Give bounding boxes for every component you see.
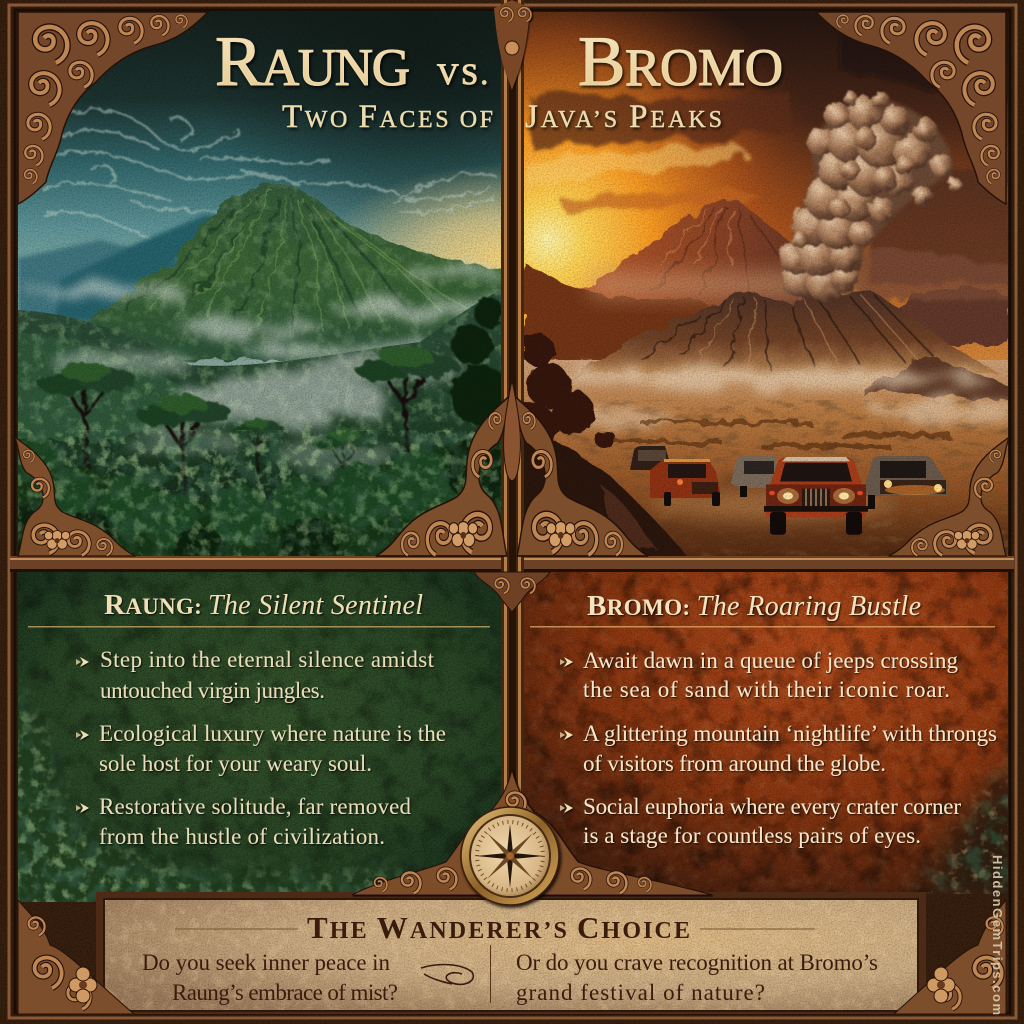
title: BROMO bbox=[578, 23, 783, 101]
foliage lower left bbox=[18, 680, 418, 902]
ornament: bottom right corner bbox=[894, 900, 1006, 1014]
sunset sky bbox=[524, 12, 1008, 372]
jeep: red left bbox=[650, 459, 720, 506]
panel: Bromo illustration bbox=[502, 12, 1024, 570]
swirling clouds bbox=[42, 109, 496, 238]
icon: compass bbox=[461, 807, 559, 905]
bullet 2 bbox=[76, 721, 446, 776]
bullet 1: untouched virgin jungles. bbox=[100, 678, 325, 703]
bullet 3: Restorative solitude, far removed bbox=[99, 794, 412, 819]
text block: Raung bbox=[28, 589, 490, 849]
Bromo crater bbox=[570, 290, 1008, 400]
ornament: beam junction bbox=[474, 572, 550, 612]
ornament: pillar finial bbox=[504, 380, 520, 480]
mist bands bbox=[30, 267, 510, 357]
parchment rules bbox=[175, 928, 815, 930]
right question: Or do you crave recognition at Bromo’s bbox=[516, 950, 878, 975]
bullet 2: sole host for your weary soul. bbox=[99, 751, 372, 776]
subtitle: TWO FACES OF bbox=[282, 99, 493, 135]
ornament: picture lower left bbox=[15, 437, 135, 556]
sand sea bbox=[524, 360, 1008, 570]
bullet 3: Social euphoria where every crater corner bbox=[583, 794, 961, 819]
road dust bbox=[668, 471, 872, 552]
jungle canopy bbox=[18, 296, 501, 556]
watermark: HiddenGemTrips.com bbox=[990, 855, 1005, 1015]
bullet 1: Await dawn in a queue of jeeps crossing bbox=[583, 648, 958, 673]
Raung mountain bbox=[60, 183, 510, 363]
panel: Raung illustration bbox=[4, 12, 514, 578]
text block: Bromo bbox=[530, 590, 997, 848]
right question: grand festival of nature? bbox=[516, 980, 765, 1005]
bullet 1: Step into the eternal silence amidst bbox=[100, 647, 435, 672]
bullet 1 bbox=[560, 648, 958, 702]
horizontal frame beam bbox=[10, 556, 1014, 572]
title: VS. bbox=[437, 58, 488, 91]
bullet 2: of visitors from around the globe. bbox=[583, 751, 886, 776]
bullet 3: from the hustle of civilization. bbox=[99, 824, 385, 849]
right question bbox=[516, 950, 878, 1005]
heading: Bromo: BROMO: The Roaring Bustle bbox=[587, 590, 921, 622]
mist over sand bbox=[530, 369, 1024, 429]
left question bbox=[142, 950, 398, 1005]
ornament: compass scrollwork bbox=[352, 770, 712, 895]
distant cone bbox=[582, 198, 804, 307]
bullet 3 bbox=[560, 794, 961, 848]
foliage lower right bbox=[912, 756, 1008, 894]
subtitle: JAVA’S PEAKS bbox=[525, 99, 722, 135]
icon: flourish swirl bbox=[421, 965, 473, 984]
subtitle bbox=[282, 99, 722, 135]
bullet 2: A glittering mountain ‘nightlife’ with throngs bbox=[583, 721, 997, 746]
panel: wanderer's choice parchment bbox=[96, 892, 926, 1014]
ornament: top left corner bbox=[18, 12, 208, 204]
bullet 3 bbox=[76, 794, 412, 849]
bullet 1: the sea of sand with their iconic roar. bbox=[583, 677, 950, 702]
forest slopes bbox=[18, 290, 501, 504]
parchment heading: THE WANDERER’S CHOICE bbox=[307, 910, 690, 945]
smoke plume bbox=[779, 91, 962, 302]
title: RAUNG bbox=[215, 23, 410, 101]
ornament: top centre crest bbox=[494, 0, 531, 90]
jeeps bbox=[630, 446, 948, 535]
sky bbox=[18, 12, 501, 366]
panel: Bromo text background bbox=[524, 572, 1008, 894]
foliage texture bbox=[18, 290, 501, 501]
jeep: rear left bbox=[630, 446, 672, 470]
mist over valley bbox=[50, 352, 465, 471]
ornament: bottom left corner bbox=[18, 900, 134, 1014]
title bbox=[215, 23, 783, 101]
ornament: picture lower centre left bbox=[376, 395, 511, 556]
jeep: lead red bbox=[764, 457, 868, 535]
bullet 1 bbox=[76, 647, 435, 703]
central vertical pillar bbox=[501, 0, 524, 880]
ornament: picture lower centre right bbox=[513, 395, 648, 556]
jeep: right silver bbox=[866, 456, 948, 509]
ornament: picture lower right bbox=[889, 437, 1009, 556]
heading: Raung: RAUNG: The Silent Sentinel bbox=[104, 589, 423, 621]
dark ridge left bbox=[524, 264, 709, 360]
ornament: top right corner bbox=[816, 12, 1006, 204]
left question: Raung’s embrace of mist? bbox=[172, 980, 398, 1005]
bullet 2: Ecological luxury where nature is the bbox=[99, 721, 446, 746]
jeep: grey centre bbox=[731, 456, 778, 497]
panel: Raung text background bbox=[18, 572, 502, 902]
dark foliage and rocks left bbox=[524, 332, 687, 556]
blue back ridge bbox=[54, 212, 216, 322]
bullet 2 bbox=[560, 721, 997, 776]
bullet 3: is a stage for countless pairs of eyes. bbox=[583, 823, 921, 848]
left question: Do you seek inner peace in bbox=[142, 950, 390, 975]
